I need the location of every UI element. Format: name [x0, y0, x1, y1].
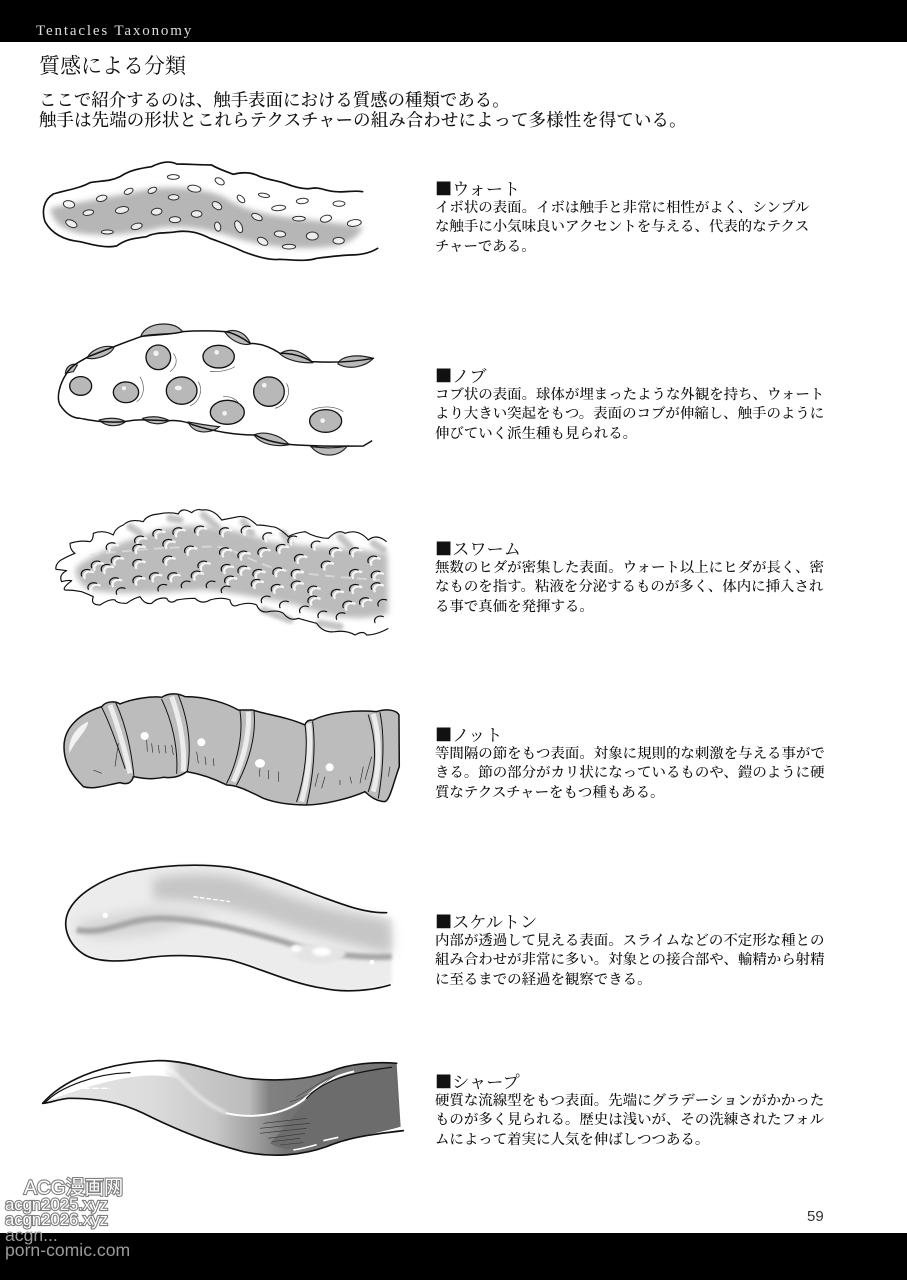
section: knob: 伸びていく派生種も見られる。 — [435, 422, 637, 443]
section: skeleton: 内部が透過して見える表面。スライムなどの不定形な種との — [435, 929, 824, 950]
section: sharp: ■シャープ — [435, 1068, 520, 1093]
section: sharp: ムによって着実に人気を伸ばしつつある。 — [435, 1128, 709, 1149]
section: knot: 等間隔の節をもつ表面。対象に規則的な刺激を与える事がで — [435, 742, 825, 763]
watermark — [4, 1176, 130, 1260]
watermark: ACG漫画网 — [24, 1177, 123, 1199]
section: swarm: る事で真価を発揮する。 — [435, 595, 594, 616]
section: skeleton — [435, 908, 825, 989]
section: knot: 質なテクスチャーをもつ種もある。 — [435, 781, 665, 802]
section: swarm: なものを指す。粘液を分泌するものが多く、体内に挿入され — [435, 575, 823, 596]
section: knob — [435, 362, 824, 443]
section: swarm: ■スワーム — [435, 535, 521, 560]
section: knob: より大きい突起をもつ。表面のコブが伸縮し、触手のように — [435, 402, 824, 423]
section: skeleton: ■スケルトン — [435, 908, 537, 933]
section: sharp — [435, 1068, 824, 1149]
section: wart: な触手に小気味良いアクセントを与える、代表的なテクス — [435, 215, 809, 236]
intro text: 触手は先端の形状とこれらテクスチャーの組み合わせによって多様性を得ている。 — [39, 106, 687, 131]
running title: Tentacles Taxonomy — [36, 23, 193, 39]
illustration: knot tentacle — [64, 694, 399, 805]
watermark: acgn... — [5, 1225, 58, 1245]
illustration: knob tentacle — [58, 324, 373, 455]
section: sharp: ものが多く見られる。歴史は浅いが、その洗練されたフォル — [435, 1108, 824, 1129]
section: wart: チャーである。 — [435, 235, 536, 256]
intro text — [39, 86, 687, 131]
section: skeleton: に至るまでの経過を観察できる。 — [435, 968, 652, 989]
section: wart — [435, 175, 809, 256]
intro text: ここで紹介するのは、触手表面における質感の種類である。 — [39, 86, 510, 111]
watermark: acgn2025.xyz — [5, 1195, 108, 1214]
footer bar — [0, 1233, 907, 1280]
illustration: wart tentacle — [43, 162, 378, 260]
section: knot: ■ノット — [435, 721, 503, 746]
watermark: porn-comic.com — [5, 1240, 130, 1260]
watermark: acgn2026.xyz — [5, 1210, 108, 1229]
illustration: sharp tentacle — [43, 1061, 403, 1155]
header bar — [0, 0, 907, 42]
illustration: skeleton tentacle — [66, 865, 392, 991]
section: swarm: 無数のヒダが密集した表面。ウォート以上にヒダが長く、密 — [435, 556, 824, 577]
section: knob: コブ状の表面。球体が埋まったような外観を持ち、ウォート — [435, 383, 824, 404]
page number: 59 — [807, 1208, 824, 1225]
section: swarm — [435, 535, 824, 616]
section: wart: ■ウォート — [435, 175, 520, 200]
section: skeleton: 組み合わせが非常に多い。対象との接合部や、輸精から射精 — [435, 948, 825, 969]
section: sharp: 硬質な流線型をもつ表面。先端にグラデーションがかかった — [435, 1089, 824, 1110]
section: knot — [435, 721, 825, 802]
illustration: swarm tentacle — [56, 510, 388, 635]
page heading: 質感による分類 — [39, 50, 186, 80]
section: wart: イボ状の表面。イボは触手と非常に相性がよく、シンプル — [435, 196, 809, 217]
section: knob: ■ノブ — [435, 362, 487, 387]
section: knot: きる。節の部分がカリ状になっているものや、鎧のように硬 — [435, 761, 825, 782]
